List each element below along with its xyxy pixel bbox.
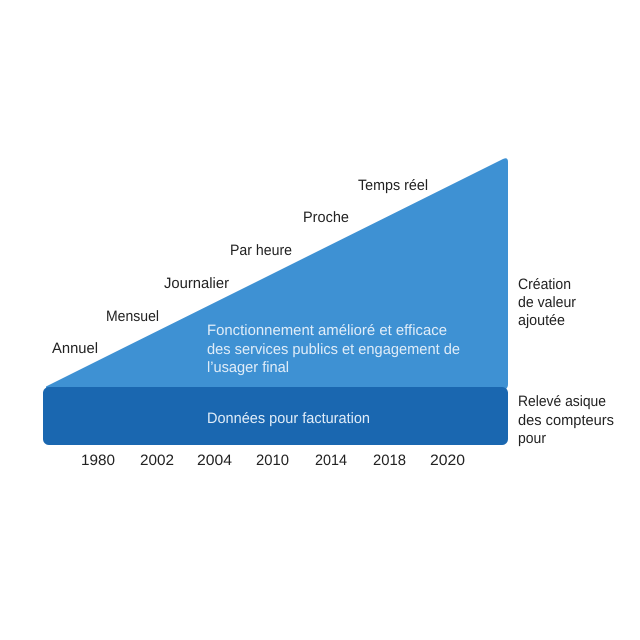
text: triangle description: l’usager final	[207, 359, 289, 376]
right label: meter reading	[518, 393, 614, 447]
text: triangle description: des services publics et engagement de	[207, 341, 460, 358]
year axis: 2010	[256, 452, 289, 469]
text: triangle description	[207, 322, 460, 376]
right label: meter reading: Relevé asique	[518, 393, 606, 410]
bar: billing data	[43, 387, 508, 445]
triangle: improved operation	[46, 158, 508, 390]
right label: meter reading: pour	[518, 430, 546, 447]
year axis: 1980	[81, 452, 115, 469]
frequency labels: Temps réel	[358, 177, 428, 194]
year axis	[81, 452, 465, 469]
chart: value triangle	[46, 158, 508, 390]
right label: value creation: ajoutée	[518, 312, 565, 329]
frequency labels: Mensuel	[106, 308, 159, 325]
frequency labels: Par heure	[230, 242, 292, 259]
right label: meter reading: des compteurs	[518, 412, 614, 429]
right label: value creation: de valeur	[518, 294, 576, 311]
right label: value creation: Création	[518, 276, 571, 293]
year axis: 2002	[140, 452, 174, 469]
text: billing label: Données pour facturation	[207, 410, 370, 427]
text: triangle description: Fonctionnement amélioré et efficace	[207, 322, 447, 339]
year axis: 2004	[197, 452, 232, 469]
frequency labels: Journalier	[164, 275, 229, 292]
frequency labels: Annuel	[52, 340, 98, 357]
frequency labels: Proche	[303, 209, 349, 226]
year axis: 2018	[373, 452, 406, 469]
right label: value creation	[518, 276, 576, 329]
year axis: 2020	[430, 452, 465, 469]
frequency labels	[52, 177, 428, 357]
year axis: 2014	[315, 452, 347, 469]
